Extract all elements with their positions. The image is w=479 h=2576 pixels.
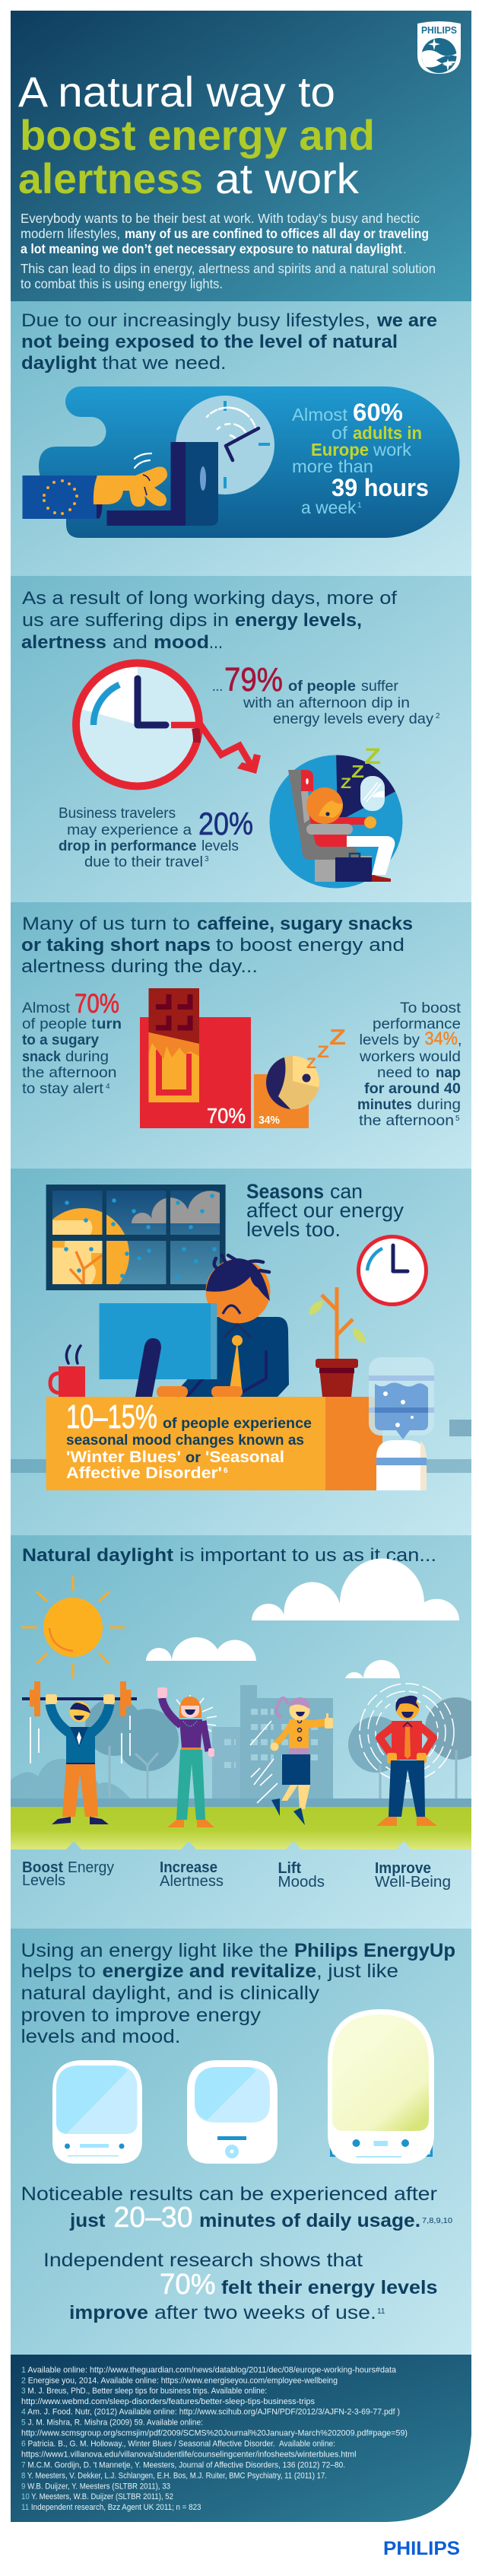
- callout: 34% nap: during: [417, 1096, 461, 1113]
- callout: 70% sugary snack: during: [65, 1048, 109, 1065]
- callout: 20% drop: 20%: [198, 806, 253, 841]
- callout: 34% nap: [357, 1000, 462, 1129]
- callout: 79% of people: ...: [212, 679, 223, 695]
- callout: 70% sugary snack: 4: [106, 1083, 110, 1091]
- callout: 70% felt energy: improve: [69, 2302, 148, 2323]
- chart: 70% red square with chocolate bar: 70%: [207, 1104, 246, 1127]
- text: reference list: 3 M. J. Breus, PhD., Better sleep tips for business trips. Available online:: [21, 2387, 267, 2396]
- callout: 34% nap: performance: [373, 1016, 461, 1032]
- text: reference list: 9 W.B. Duijzer, Y. Meesters (SLTBR 2011), 33: [21, 2482, 170, 2491]
- intro text: to combat this is using energy lights.: [21, 276, 223, 291]
- floor band: [11, 1459, 471, 1473]
- callout: 20-30 minutes: minutes of daily usage.: [199, 2210, 420, 2231]
- callout: 34% nap: minutes: [357, 1096, 412, 1113]
- intro text: modern lifestyles,: [21, 226, 120, 241]
- callout: 34% nap: 5: [455, 1115, 460, 1123]
- callout: 10-15% winter blues: Affective Disorder': [66, 1465, 222, 1482]
- text: reference list: https://www1.villanova.edu/villanova/studentlife/counselingcenter/infosheets/winterblues.html: [21, 2450, 357, 2460]
- chart: 34% orange square with sleeping head: Z: [317, 1042, 329, 1061]
- heading: lack of daylight: not being exposed to the level of natural: [21, 332, 398, 352]
- callout: 60% of adults: work: [373, 440, 412, 460]
- text: reference list: 11 Independent research, Bzz Agent UK 2011; n = 823: [21, 2503, 201, 2512]
- callout: 34% nap: 34%: [424, 1029, 458, 1049]
- text: reference list: 8 Y. Meesters, V. Dekker, L.J. Schlangen, E.H. Bos, M.J. Ruiter, BMC Psychiatry, 11 (2011) 17.: [21, 2471, 327, 2480]
- icon: Philips shield: PHILIPS: [421, 25, 457, 36]
- illustration: sleeping traveler: Z: [341, 776, 351, 792]
- callout: 70% sugary snack: of people t: [22, 1016, 97, 1032]
- text: reference list: 6 Patricia. B., G. M. Holloway., Winter Blues / Seasonal Affective Disorder. Available online:: [21, 2439, 335, 2448]
- chart: 34% orange square with sleeping head: Z: [329, 1026, 346, 1050]
- callout: 60% of adults: [292, 399, 429, 517]
- intro text: many of us are confined to offices all day or traveling: [125, 226, 429, 241]
- panel: Philips EnergyUp: [11, 1929, 471, 2355]
- callout: 70% sugary snack: urn: [97, 1016, 122, 1032]
- benefit labels: Increase: [160, 1859, 217, 1876]
- callout: 60% of adults: 60%: [353, 399, 403, 426]
- icon: lamp one: [52, 2060, 142, 2164]
- callout: 60% of adults: adults in: [353, 423, 422, 443]
- callout: 70% sugary snack: to a sugary: [22, 1032, 99, 1048]
- figure: man lifting barbell: [22, 1681, 137, 1824]
- callout: 10-15% winter blues: 'Seasonal: [205, 1449, 284, 1466]
- heading: seasons: [246, 1180, 404, 1241]
- heading: seasons: affect our energy: [246, 1199, 404, 1222]
- callout: 70% felt energy: [43, 2250, 438, 2323]
- panel: references: [11, 2355, 471, 2522]
- text: reference list: http://www.webmd.com/sleep-disorders/features/better-sleep-tips-business-trips: [21, 2397, 315, 2406]
- panel: header: [11, 11, 471, 301]
- icon: wall clock: [176, 396, 274, 495]
- callout: 10-15% winter blues: of people experience: [163, 1415, 312, 1432]
- text: reference list: 5 J. M. Mishra, R. Mishra (2009) 59. Available online:: [21, 2419, 203, 2428]
- icon: Philips shield: [417, 21, 461, 74]
- heading: lack of daylight: we are: [376, 310, 437, 331]
- heading: coping strategies: caffeine, sugary snacks: [197, 914, 413, 934]
- callout: 70% sugary snack: the afternoon: [22, 1064, 117, 1081]
- callout: 20% drop: [59, 806, 253, 870]
- callout: 10-15% winter blues: [66, 1398, 312, 1482]
- callout: 34% nap: To boost: [400, 1000, 462, 1016]
- callout: 10-15% winter blues: 10–15%: [66, 1398, 157, 1436]
- callout: 60% of adults: of: [331, 423, 348, 443]
- callout: 20-30 minutes: 7,8,9,10: [422, 2217, 452, 2225]
- heading: dips in energy: [21, 588, 397, 653]
- illustration: desk: [46, 1397, 382, 1490]
- icon: water cooler: [369, 1357, 434, 1490]
- heading: dips in energy: As a result of long working days, more of: [22, 588, 397, 609]
- panel: coping strategies: [11, 902, 471, 1169]
- illustration: sleeping traveler: Z: [364, 744, 381, 769]
- callout: 70% sugary snack: 70%: [75, 989, 119, 1019]
- panel: lack of daylight: [11, 301, 471, 576]
- intro text: EnergyUp: [21, 1940, 455, 2047]
- ground: [11, 1807, 471, 1849]
- benefit labels: Levels: [22, 1872, 65, 1889]
- icon: office clock: [359, 1237, 426, 1304]
- title: alertness: [18, 154, 203, 202]
- icon: clouds: [146, 1558, 459, 1678]
- callout: 20% drop: Business travelers: [59, 806, 176, 822]
- intro text: EnergyUp: Using an energy light like the: [21, 1940, 288, 1961]
- callout: 20% drop: may experience a: [67, 822, 192, 838]
- intro text: EnergyUp: natural daylight, and is clinically: [21, 1983, 320, 2004]
- figure: jumping woman thumbs up: [250, 1697, 333, 1825]
- benefit labels: Improve: [375, 1860, 431, 1877]
- heading: lack of daylight: daylight: [21, 353, 97, 374]
- text: reference list: 1 Available online: http://www.theguardian.com/news/datablog/2011/dec/08/europe-working-hours#data: [21, 2365, 396, 2374]
- callout: 34% nap: the afternoon: [359, 1112, 454, 1129]
- small wall socket: [449, 1420, 471, 1436]
- callout: 34% nap: levels by: [359, 1032, 420, 1048]
- title: [18, 68, 375, 202]
- heading: seasons: can: [330, 1180, 363, 1203]
- callout: 34% nap: need to: [377, 1064, 430, 1081]
- callout: 34% nap: for around 40: [364, 1080, 461, 1097]
- callout: 20% drop: 3: [205, 855, 209, 863]
- intro text: EnergyUp: energize and revitalize: [102, 1961, 316, 1982]
- heading: coping strategies: alertness during the day...: [21, 956, 258, 977]
- figure: confident man: [360, 1684, 454, 1826]
- figure: alert woman pointing: [157, 1687, 217, 1827]
- chart: 34% orange square with sleeping head: [254, 1026, 346, 1128]
- text: reference list: 10 Y. Meesters, W.B. Duijzer (SLTBR 2011), 52: [21, 2492, 173, 2501]
- intro text: EnergyUp: , just like: [316, 1961, 398, 1982]
- text: reference list: http://www.scmsgroup.org/scmsjim/pdf/2009/SCMS%20Journal%20January-March%202009.pdf#page=59): [21, 2429, 408, 2438]
- heading: seasons: levels too.: [246, 1218, 341, 1241]
- callout: 79% of people: suffer: [361, 679, 399, 695]
- icon: lit lamp three: [328, 2009, 434, 2164]
- panel: natural daylight benefits: [11, 1535, 479, 1929]
- callout: 20-30 minutes: Noticeable results can be experienced after: [21, 2183, 437, 2205]
- heading: natural daylight: [22, 1545, 436, 1566]
- callout: 34% nap: workers would: [359, 1048, 461, 1065]
- icon: lamp two: [187, 2060, 278, 2164]
- callout: 79% of people: 2: [436, 712, 440, 720]
- callout: 60% of adults: 1: [357, 501, 362, 510]
- callout: 20-30 minutes: 20–30: [114, 2202, 193, 2234]
- callout: 10-15% winter blues: seasonal mood changes known as: [66, 1432, 304, 1449]
- heading: coping strategies: to boost energy and: [216, 935, 404, 956]
- icon: large clock: [76, 663, 199, 787]
- callout: 20-30 minutes: just: [69, 2210, 106, 2231]
- benefit labels: [22, 1859, 451, 1891]
- benefit labels: Lift: [278, 1860, 301, 1877]
- heading: natural daylight: is important to us as it can...: [179, 1545, 436, 1566]
- title: boost energy and: [20, 111, 375, 159]
- callout: 20% drop: due to their travel: [84, 854, 203, 870]
- benefit labels: Boost: [22, 1859, 63, 1876]
- heading: dips in energy: mood: [154, 632, 209, 653]
- chart: 70% red square with chocolate bar: [140, 988, 251, 1128]
- intro text: EnergyUp: levels and mood.: [21, 2026, 181, 2047]
- callout: 70% sugary snack: [22, 989, 122, 1097]
- callout: 70% sugary snack: to stay alert: [22, 1080, 104, 1097]
- intro text: EnergyUp: Philips EnergyUp: [294, 1940, 455, 1961]
- callout: 10-15% winter blues: 6: [224, 1467, 228, 1475]
- benefit labels: Alertness: [160, 1873, 224, 1890]
- logo: Philips wordmark: PHILIPS: [383, 2538, 460, 2559]
- intro text: This can lead to dips in energy, alertness and spirits and a natural solution: [21, 261, 436, 276]
- callout: 20% drop: levels: [201, 838, 239, 854]
- heading: dips in energy: alertness: [21, 632, 106, 653]
- heading: lack of daylight: that we need.: [102, 353, 227, 374]
- heading: lack of daylight: [21, 310, 437, 374]
- callout: 79% of people: of people: [288, 679, 356, 695]
- chart: 34% orange square with sleeping head: Z: [306, 1056, 316, 1072]
- illustration: sleeping traveler: Z: [351, 762, 364, 781]
- callout: 10-15% winter blues: 'Winter Blues': [66, 1449, 181, 1466]
- title: at work: [215, 154, 360, 202]
- heading: lack of daylight: Due to our increasingly busy lifestyles,: [21, 310, 370, 331]
- text: reference list: 2 Energise you, 2014. Available online: https://www.energiseyou.com/employee-wellbeing: [21, 2376, 338, 2385]
- callout: 60% of adults: Europe: [311, 440, 369, 460]
- intro text: EnergyUp: proven to improve energy: [21, 2005, 262, 2026]
- heading: dips in energy: energy levels,: [235, 610, 362, 631]
- callout: 70% felt energy: after two weeks of use.: [154, 2302, 376, 2323]
- callout: 60% of adults: 39 hours: [331, 474, 429, 501]
- benefit labels: Well-Being: [375, 1874, 451, 1891]
- illustration: sleeping traveler: [269, 744, 411, 889]
- illustration: tired office worker: [99, 1255, 289, 1398]
- callout: 34% nap: ,: [458, 1032, 462, 1048]
- heading: coping strategies: [21, 914, 413, 977]
- icon: laptop: [106, 442, 218, 526]
- callout: 34% nap: nap: [436, 1064, 461, 1081]
- callout: 20-30 minutes: [21, 2183, 452, 2234]
- callout: 70% felt energy: Independent research shows that: [43, 2250, 363, 2271]
- callout: 79% of people: with an afternoon dip in: [243, 695, 410, 711]
- benefit labels: Moods: [278, 1874, 325, 1891]
- intro text: a lot meaning we don’t get necessary exposure to natural daylight: [21, 241, 402, 256]
- intro text: Everybody wants to be their best at work. With today’s busy and hectic: [21, 211, 420, 226]
- background: city and trees: [11, 1685, 479, 1807]
- illustration: blue work-hours blob: [39, 386, 459, 538]
- callout: 70% sugary snack: snack: [22, 1048, 61, 1065]
- intro text: [21, 211, 436, 291]
- callout: 60% of adults: a week: [301, 498, 357, 517]
- heading: dips in energy: us are suffering dips in: [22, 610, 229, 631]
- callout: 79% of people: energy levels every day: [273, 711, 434, 727]
- callout: 60% of adults: more than: [292, 456, 373, 476]
- heading: coping strategies: Many of us turn to: [22, 914, 190, 934]
- text: reference list: 7 M.C.M. Gordijn, D. 't Mannetje, Y. Meesters, Journal of Affective Disorders, 136 (2012) 72–80.: [21, 2461, 345, 2470]
- callout: 10-15% winter blues: or: [186, 1449, 201, 1466]
- chart: 34% orange square with sleeping head: 34%: [259, 1114, 280, 1127]
- icon: potted plant: [309, 1287, 365, 1397]
- icon: sun: [21, 1576, 125, 1678]
- benefit labels: Energy: [68, 1859, 114, 1876]
- panel: seasons: [11, 1169, 471, 1535]
- heading: dips in energy: and: [113, 632, 148, 653]
- intro text: .: [403, 241, 407, 256]
- text: reference list: [21, 2365, 408, 2512]
- icon: tapping hand in EU sleeve: [23, 453, 167, 519]
- callout: 70% felt energy: felt their energy levels: [221, 2277, 438, 2298]
- illustration: winter window: [46, 1185, 226, 1290]
- heading: natural daylight: Natural daylight: [22, 1545, 173, 1566]
- heading: seasons: Seasons: [246, 1180, 324, 1203]
- panel: dips in energy: [11, 576, 471, 902]
- callout: 60% of adults: Almost: [292, 405, 348, 425]
- intro text: EnergyUp: helps to: [21, 1961, 96, 1982]
- icon: coffee mug: [50, 1346, 85, 1397]
- callout: 70% sugary snack: Almost: [22, 1000, 71, 1016]
- title: A natural way to: [18, 68, 335, 116]
- callout: 20% drop: drop in performance: [59, 838, 196, 854]
- arrow: falling energy: [171, 725, 261, 774]
- callout: 70% felt energy: 70%: [160, 2269, 216, 2301]
- callout: 79% of people: 79%: [224, 661, 283, 698]
- callout: 79% of people: [212, 661, 440, 727]
- callout: 70% felt energy: 11: [377, 2307, 385, 2316]
- text: reference list: 4 Am. J. Food. Nutr, (2012) Available online: http://www.scihub.org/AJFN/PDF/2012/3/AJFN-2-3-69-77.pdf ): [21, 2408, 400, 2417]
- heading: dips in energy: ...: [209, 632, 223, 653]
- heading: coping strategies: or taking short naps: [21, 935, 211, 956]
